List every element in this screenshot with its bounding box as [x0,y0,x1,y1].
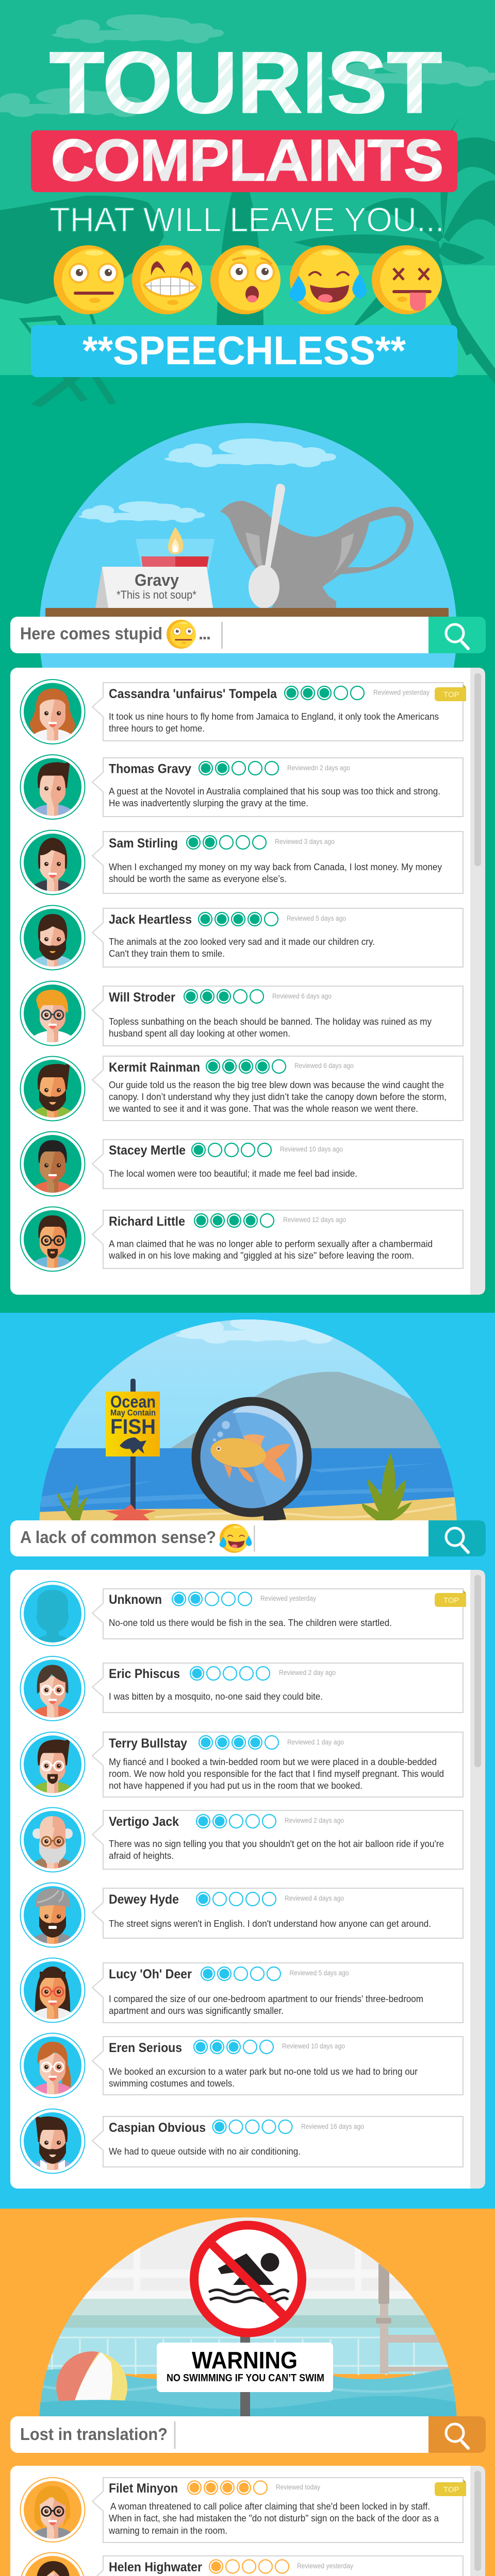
title: TOURIST [50,34,442,131]
comment: When in fact, she had mistaken the "do not disturb" sign on the back of the door as a [109,2513,439,2523]
panel: blue section background [0,1313,495,2209]
search bar: a lack of common sense: A lack of common sense? [20,1528,216,1547]
speech bubble [92,1663,463,1713]
avatar: Will [21,981,85,1046]
comment: We booked an excursion to a water park but no-one told us we had to bring our [109,2066,418,2077]
emoji row [54,245,442,314]
review: Thomas [21,755,463,819]
name: Lucy 'Oh' Deer [109,1967,192,1981]
plants and starfish [57,1453,412,1520]
comment: The animals at the zoo looked very sad and it made our children cry. [109,937,375,947]
review: Kermit [21,1056,463,1121]
date: Reviewed yesterday [373,688,430,697]
avatar: Dewey [21,1883,85,1947]
speech bubble [92,683,463,741]
illustration: ocean scene [36,1315,459,1526]
review: Helen [21,2552,463,2576]
warning plate: WARNING [192,2347,298,2374]
speech bubble [92,832,463,893]
review: Filet [21,2478,466,2543]
rating [194,1214,274,1227]
avatar: Caspian [21,2109,85,2173]
avatar: Kermit [21,1056,85,1121]
rating [190,1667,270,1680]
comment: room. We now hold you responsible for the fact that I find myself pregnant. This would [109,1769,444,1779]
comment: apartment and ours was significantly smaller. [109,2006,284,2016]
comment [109,1839,444,1861]
comment: A woman threatened to call police after claiming that she'd been locked in by staff. [110,2501,430,2512]
avatar: Thomas [21,755,85,819]
comment [108,2501,439,2536]
speech bubble [92,2556,463,2576]
comment [109,862,442,884]
sign: ocean may contain fish: FISH [110,1415,156,1438]
panel: orange section background [0,2209,495,2576]
date: Reviewed 10 days ago [282,2042,345,2050]
comment [109,711,439,734]
top tag [435,685,466,701]
avatar: Sam [21,831,85,894]
speech bubble [92,1056,463,1121]
review: Vertigo [21,1807,463,1872]
name: Terry Bullstay [109,1736,187,1751]
comment: canopy. I don’t understand why they just didn’t take the canopy down before the storm, [109,1092,447,1102]
comment: I was bitten by a mosquito, no-one said they could bite. [109,1691,323,1702]
comment: My fiancé and I booked a twin-bedded room but we were placed in a double-bedded [109,1757,437,1767]
comment [109,1016,432,1039]
search bar: a lack of common sense [10,1520,486,1556]
date: Reviewedn 2 days ago [287,764,350,772]
avatar: Jack [21,906,85,970]
name: Dewey Hyde [109,1892,179,1907]
sign: ocean may contain fish [106,1379,160,1520]
avatar: Stacey [21,1131,85,1196]
date: Reviewed 10 days ago [280,1145,343,1153]
rating [188,2481,267,2495]
comment: not have happened if you had put us in the room that we booked. [109,1781,362,1791]
review: Dewey [21,1883,463,1947]
rating [194,2040,273,2054]
comment: afraid of heights. [109,1851,174,1861]
gravy boat [220,501,414,608]
sign: ocean may contain fish: May Contain [110,1408,156,1418]
review: Unknown [21,1582,466,1646]
avatar: Lucy [21,1958,85,2023]
date: Reviewed 6 days ago [272,992,332,1000]
comment: He was inadvertently slurping the gravy at the time. [109,798,308,808]
comment: A man claimed that he was no longer able to perform sexually after a chambermaid [109,1239,433,1249]
pool ladder [376,2263,450,2374]
panel: header background [0,0,495,1313]
name: Kermit Rainman [109,1060,200,1075]
name: Caspian Obvious [109,2121,206,2135]
speech bubble [92,908,463,967]
rating [206,1060,286,1073]
candle [136,527,214,569]
review: Eric [21,1656,463,1721]
review: Sam [21,831,463,894]
review: Will [21,981,463,1046]
date: Reviewed 4 days ago [285,1894,344,1902]
search bar: here comes stupid [10,617,486,653]
avatar: Richard [21,1207,85,1272]
panel: complaints banner [31,130,457,192]
search bar: here comes stupid: ... [199,624,211,643]
comment: When I exchanged my money on my way back from Canada, I lost money. My money [109,862,442,872]
review: Stacey [21,1131,463,1196]
name: Vertigo Jack [109,1815,179,1829]
comment: The local women were too beautiful; it made me feel bad inside. [109,1168,357,1179]
avatar: Filet [21,2478,85,2542]
rating [192,1143,271,1157]
illustration: gravy scene [40,423,456,668]
warning plate [157,2343,333,2392]
spoon [249,484,285,608]
speech bubble [92,1210,463,1268]
review: Cassandra [21,680,466,744]
rating [199,761,278,775]
review: Jack [21,906,463,970]
comment: Our guide told us the reason the big tree blew down was because the wind caught the [109,1080,444,1090]
name: Jack Heartless [109,912,192,927]
avatar: Cassandra [21,680,85,744]
name: Unknown [109,1592,162,1607]
speech bubble [92,758,463,817]
search bar: lost in translation: Lost in translation? [20,2425,168,2444]
comment: should be worth the same as everyone else’s. [109,874,287,884]
speech bubble [92,1963,463,2023]
umbrella, board and palm silhouettes [0,117,495,407]
name: Helen Highwater [109,2560,202,2574]
name: Stacey Mertle [109,1143,186,1158]
comment [109,2066,418,2089]
title: COMPLAINTS [51,128,443,193]
rating [172,1592,252,1605]
comment: It took us nine hours to fly home from Jamaica to England, it only took the Americans [109,711,439,722]
date: Reviewed 2 day ago [279,1669,336,1676]
date: Reviewed 16 days ago [301,2123,364,2130]
rating [199,912,278,926]
date: Reviewed 3 days ago [275,838,335,845]
gravy name card: Gravy [135,571,179,589]
comment: Topless sunbathing on the beach should be banned. The holiday was ruined as my [109,1016,432,1027]
rating [201,1967,280,1980]
beach ball [52,2349,134,2427]
comment [109,937,375,959]
illustration: pool scene [31,2215,465,2427]
comment: There was no sign telling you that you shouldn't get on the hot air balloon ride if you're [109,1839,444,1849]
top tag [435,2480,466,2496]
date: Reviewed 12 days ago [283,1216,346,1224]
gravy name card: *This is not soup* [117,588,196,601]
date: Reviewed 5 days ago [287,914,346,922]
speech bubble [92,2116,463,2167]
date: Reviewed 2 days ago [285,1817,344,1824]
title: THAT WILL LEAVE YOU... [50,200,444,239]
review: Caspian [21,2109,463,2173]
name: Will Stroder [109,990,175,1005]
speechless banner [31,325,457,377]
avatar: Helen [21,2552,85,2576]
rating [285,686,364,700]
rating [187,836,266,849]
review: Richard [21,1207,463,1272]
comment: I compared the size of our one-bedroom apartment to our friends' three-bedroom [109,1994,423,2004]
comment [108,1080,447,1114]
avatar: Eren [21,2033,85,2098]
speech bubble [92,1732,463,1797]
comment: Can't they train them to smile. [109,948,225,959]
rating [196,1892,276,1906]
comment: we wanted to see it and it was gone. That was the whole reason we went there. [108,1104,418,1114]
comment: We had to queue outside with no air conditioning. [109,2146,301,2157]
comment [109,1994,423,2016]
name: Cassandra 'unfairus' Tompela [109,687,277,701]
speech bubble [92,1810,463,1869]
comment [108,1239,433,1261]
comment: swimming costumes and towels. [109,2078,235,2089]
avatar: Terry [21,1732,85,1797]
warning plate: NO SWIMMING IF YOU CAN’T SWIM [167,2372,324,2384]
panel: reviews 1 [10,668,485,1295]
review: Lucy [21,1958,463,2023]
date: Reviewed 5 days ago [290,1969,349,1977]
panel: reviews 3 [10,2466,485,2576]
search bar: here comes stupid: Here comes stupid [20,624,162,643]
name: Sam Stirling [109,836,178,851]
clouds [0,14,495,117]
speech bubble [92,1888,463,1938]
date: Reviewed yesterday [297,2562,353,2570]
comment [109,786,440,808]
comment: husband spent all day looking at other women. [109,1028,290,1039]
speech bubble [92,1140,463,1189]
search bar: lost in translation [10,2416,486,2453]
avatar: Eric [21,1656,85,1721]
speech bubble [92,986,463,1046]
avatar: Unknown [21,1582,85,1646]
date: Reviewed yesterday [260,1595,316,1602]
comment: warning to remain in the room. [108,2526,227,2536]
date: Reviewed 1 day ago [287,1738,344,1746]
magnifying glass with goldfish [196,1397,307,1520]
comment: No-one told us there would be fish in the sea. The children were startled. [109,1618,392,1628]
comment [109,1757,444,1791]
table [45,608,449,617]
name: Thomas Gravy [109,761,191,776]
panel: reviews 2 [10,1570,485,2189]
rating [184,990,263,1003]
speech bubble [92,1589,463,1639]
rating [212,2120,292,2133]
rating [199,1736,278,1749]
top tag [435,1590,466,1607]
sign: ocean may contain fish: Ocean [110,1392,156,1411]
comment: walked in on his love making and "giggled at his size" before leaving the room. [108,1250,414,1261]
name: Eric Phiscus [109,1667,180,1681]
comment: The street signs weren't in English. I don't understand how anyone can get around. [109,1919,431,1929]
review: Terry [21,1732,463,1797]
speechless banner: **SPEECHLESS** [82,328,406,373]
date: Reviewed today [276,2483,320,2491]
title [31,34,457,239]
comment: three hours to get home. [109,723,205,734]
no swimming sign [194,2225,302,2416]
rating [196,1815,276,1828]
comment: A guest at the Novotel in Australia complained that his soup was too thick and strong. [109,786,440,796]
review: Eren [21,2033,463,2098]
name: Filet Minyon [109,2481,178,2496]
speech bubble [92,2037,463,2095]
name: Eren Serious [109,2041,182,2055]
speech bubble [92,2478,463,2543]
date: Reviewed 6 days ago [294,1062,354,1070]
name: Richard Little [109,1214,185,1229]
rating [209,2560,289,2573]
avatar: Vertigo [21,1807,85,1872]
gravy name card [95,567,213,608]
